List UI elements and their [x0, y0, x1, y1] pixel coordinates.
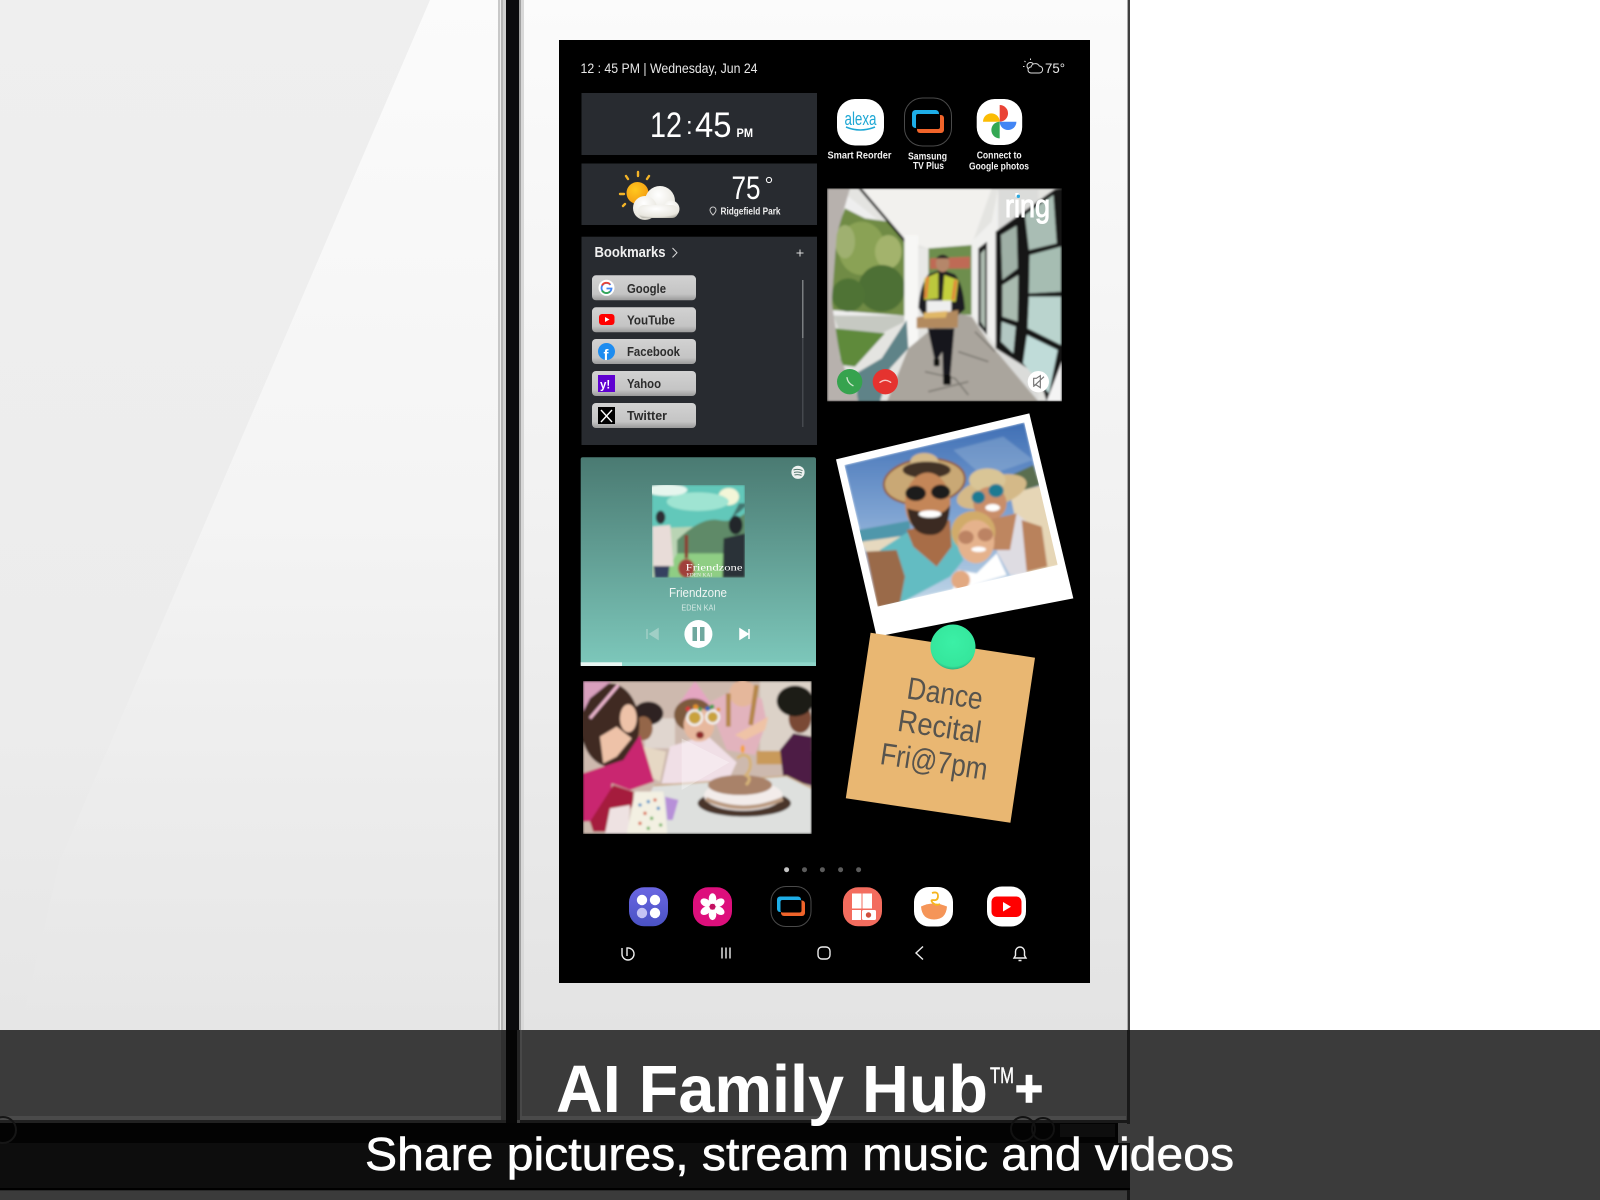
background: white wall on the right [1130, 0, 1600, 1030]
music controls [647, 620, 749, 648]
cake [698, 745, 791, 817]
bookmark: Facebook: Facebook [627, 344, 681, 359]
delivery person [917, 255, 965, 385]
icon: food [914, 887, 953, 926]
app shortcuts: Samsung [908, 150, 947, 162]
clock widget: 12 [650, 106, 682, 145]
bookmark: YouTube [592, 307, 696, 332]
icon: Smart Reorder (alexa) [837, 99, 884, 146]
background: center refrigerator door [506, 0, 1130, 1030]
Spotify music widget: Friendzone [669, 586, 727, 600]
icon: Samsung TV Plus [771, 886, 811, 926]
bookmark: Yahoo [592, 371, 696, 396]
birthday girl [662, 681, 737, 783]
icon: photo collage [843, 887, 882, 926]
weather widget: Ridgefield Park [720, 206, 781, 218]
Spotify music widget: EDEN KAI [681, 602, 715, 612]
weather widget: 75 [732, 170, 760, 206]
title: TM [990, 1063, 1014, 1088]
button: mute [1028, 371, 1049, 392]
bookmark: Yahoo: Yahoo [627, 376, 661, 391]
woman clapping [708, 680, 768, 755]
sticky note [846, 633, 1035, 823]
icon: apps [629, 887, 668, 926]
play arrow [682, 738, 729, 790]
icon: status weather [1023, 58, 1043, 73]
bookmark: Google: Google [627, 281, 666, 296]
icon: back [916, 946, 923, 960]
album art [646, 484, 745, 579]
child [951, 511, 1007, 590]
button: decline [873, 369, 898, 394]
title: AI Family Hub [556, 1052, 988, 1127]
bookmark: YouTube: YouTube [627, 312, 675, 328]
icon: recents [722, 948, 730, 958]
status bar [580, 58, 1065, 76]
woman [953, 467, 1047, 575]
pin [930, 624, 976, 670]
app shortcuts: Smart Reorder [828, 150, 892, 162]
note text: Dance [905, 671, 985, 716]
clock widget [582, 93, 817, 155]
bookmarks widget [582, 237, 817, 445]
clock widget: 45 [695, 106, 732, 145]
ring logo: ring [1005, 188, 1050, 224]
subtitle: Share pictures, stream music and videos [365, 1128, 1234, 1180]
background: left refrigerator door [0, 0, 506, 1030]
note text: Recital [895, 703, 984, 750]
status bar: 12 : 45 PM | Wednesday, Jun 24 [580, 61, 758, 76]
icon: Samsung TV Plus [904, 98, 952, 146]
bookmark: Facebook [592, 339, 696, 364]
polaroid family selfie [836, 413, 1073, 637]
clock widget: PM [736, 128, 753, 140]
app shortcuts [828, 98, 1029, 172]
bookmark: Google [592, 275, 696, 300]
navigation bar [622, 946, 1026, 960]
right child [777, 686, 813, 786]
status bar: 75° [1045, 61, 1065, 76]
man [866, 453, 967, 607]
Family Hub screen [559, 40, 1090, 983]
icon: bixby [622, 948, 634, 960]
album art: EDEN KAI [686, 574, 713, 579]
button: answer [837, 369, 862, 394]
app shortcuts: Connect to [977, 150, 1022, 162]
table [650, 774, 812, 834]
title: + [1015, 1060, 1043, 1118]
bookmark: Facebook: f [604, 347, 610, 364]
ring doorbell camera feed [827, 188, 1062, 401]
icon: sun and cloud [620, 172, 680, 220]
album art: Friendzone [686, 563, 743, 573]
icon: YouTube [987, 886, 1026, 926]
caption band with refrigerator base showing through [0, 1030, 1600, 1200]
birthday video thumbnail [581, 680, 813, 834]
bookmark: Twitter [592, 403, 696, 428]
Spotify music widget [581, 457, 816, 666]
icon: bell [1014, 947, 1026, 960]
icon: Spotify [791, 466, 805, 479]
app dock [629, 886, 1026, 926]
note text [878, 671, 990, 787]
app shortcuts: Google photos [969, 160, 1029, 172]
clock widget: : [686, 113, 693, 140]
icon: Smart Reorder (alexa): alexa [844, 109, 877, 129]
photo [844, 422, 1060, 607]
bookmark: Twitter: Twitter [627, 408, 667, 423]
icon: home [818, 947, 830, 959]
left girl [581, 681, 654, 834]
icon: gallery [693, 887, 732, 926]
bookmarks widget: Bookmarks [594, 244, 666, 261]
app shortcuts: TV Plus [913, 160, 944, 172]
note text: Fri@7pm [878, 736, 990, 787]
weather widget [582, 164, 817, 225]
page indicator dots [784, 867, 861, 872]
bookmark: Yahoo: y! [600, 380, 610, 392]
cup [627, 792, 678, 834]
icon: Google Photos [977, 99, 1022, 145]
small child [633, 702, 666, 782]
